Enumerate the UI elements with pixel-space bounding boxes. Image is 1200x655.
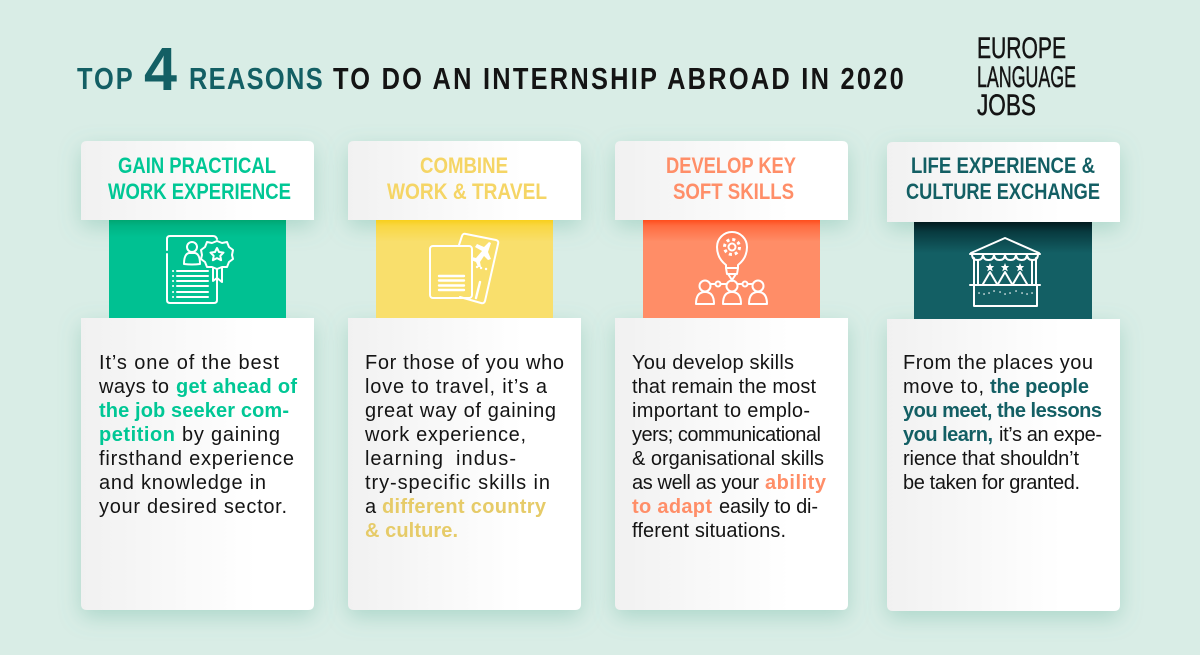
body text: by gaining	[182, 424, 280, 446]
heading: LIFE EXPERIENCE &	[911, 153, 1095, 178]
body text: a	[365, 496, 377, 518]
card body	[615, 318, 848, 610]
body text: indus-	[456, 448, 516, 470]
title: TOP	[77, 62, 133, 97]
body text: learning	[365, 448, 443, 470]
body text: You develop skills	[632, 352, 794, 374]
panel: gain practical work experience	[81, 141, 314, 610]
icon: market stall	[970, 238, 1040, 306]
panel: combine work and travel	[348, 141, 581, 610]
title: REASONS	[189, 62, 323, 97]
logo: Europe Language Jobs: EUROPE	[977, 32, 1066, 65]
heading: CULTURE EXCHANGE	[906, 179, 1100, 204]
card header	[615, 141, 848, 220]
icon: resume with award badge	[167, 236, 233, 303]
body text: It’s one of the best	[99, 352, 279, 374]
card header	[887, 142, 1120, 222]
heading	[387, 153, 547, 204]
heading	[108, 153, 291, 204]
body text: & organisational skills	[632, 448, 824, 470]
logo: Europe Language Jobs: JOBS	[977, 89, 1036, 122]
card header	[348, 141, 581, 220]
body text: you meet, the lessons	[903, 400, 1102, 422]
title	[77, 35, 904, 103]
body text: petition	[99, 424, 175, 446]
card body	[81, 318, 314, 610]
body text	[98, 352, 297, 518]
body text: the people	[990, 376, 1089, 398]
panel: develop key soft skills	[615, 141, 848, 610]
body text: yers; communicational	[632, 424, 821, 446]
body text: as well as your	[632, 472, 759, 494]
icon band: teal	[914, 222, 1092, 319]
body text: ways to	[98, 376, 169, 398]
panel: life experience and culture exchange	[887, 142, 1120, 611]
body text: ability	[765, 472, 827, 494]
body text: your desired sector.	[99, 496, 287, 518]
body text: important to emplo-	[632, 400, 810, 422]
body text: move to,	[903, 376, 984, 398]
body text: different country	[382, 496, 547, 518]
heading	[666, 153, 796, 204]
body text: easily to di-	[719, 496, 818, 518]
body text: to adapt	[632, 496, 712, 518]
title: 4	[144, 35, 177, 103]
logo: Europe Language Jobs	[977, 32, 1076, 122]
body text: From the places you	[903, 352, 1093, 374]
card header	[81, 141, 314, 220]
heading: WORK EXPERIENCE	[108, 179, 291, 204]
body text: love to travel, it’s a	[365, 376, 548, 398]
heading: GAIN PRACTICAL	[118, 153, 276, 178]
body text	[364, 352, 564, 542]
body text: it’s an expe-	[999, 424, 1102, 446]
heading: WORK & TRAVEL	[387, 179, 547, 204]
body text: For those of you who	[365, 352, 564, 374]
body text: rience that shouldn’t	[903, 448, 1079, 470]
card body	[887, 319, 1120, 611]
card body	[348, 318, 581, 610]
heading	[906, 153, 1100, 204]
body text	[632, 352, 827, 542]
icon: light bulb with team	[696, 232, 767, 304]
body text: that remain the most	[632, 376, 816, 398]
body text: be taken for granted.	[903, 472, 1080, 494]
body text: great way of gaining	[365, 400, 556, 422]
body text: the job seeker com-	[99, 400, 289, 422]
title: TO DO AN INTERNSHIP ABROAD IN 2020	[333, 62, 904, 97]
body text: get ahead of	[176, 376, 297, 398]
body text: work experience,	[364, 424, 526, 446]
heading: SOFT SKILLS	[673, 179, 794, 204]
body text: you learn,	[903, 424, 993, 446]
body text: try-specific skills in	[365, 472, 550, 494]
icon: document and plane ticket	[430, 234, 498, 303]
logo: Europe Language Jobs: LANGUAGE	[977, 61, 1076, 94]
icon band: orange	[643, 220, 820, 318]
body text: firsthand experience	[99, 448, 294, 470]
body text: and knowledge in	[99, 472, 266, 494]
icon band: green	[109, 220, 286, 318]
heading: DEVELOP KEY	[666, 153, 796, 178]
body text: fferent situations.	[632, 520, 786, 542]
icon band: yellow	[376, 220, 553, 318]
heading: COMBINE	[420, 153, 508, 178]
body text: & culture.	[365, 520, 458, 542]
body text	[903, 352, 1102, 494]
